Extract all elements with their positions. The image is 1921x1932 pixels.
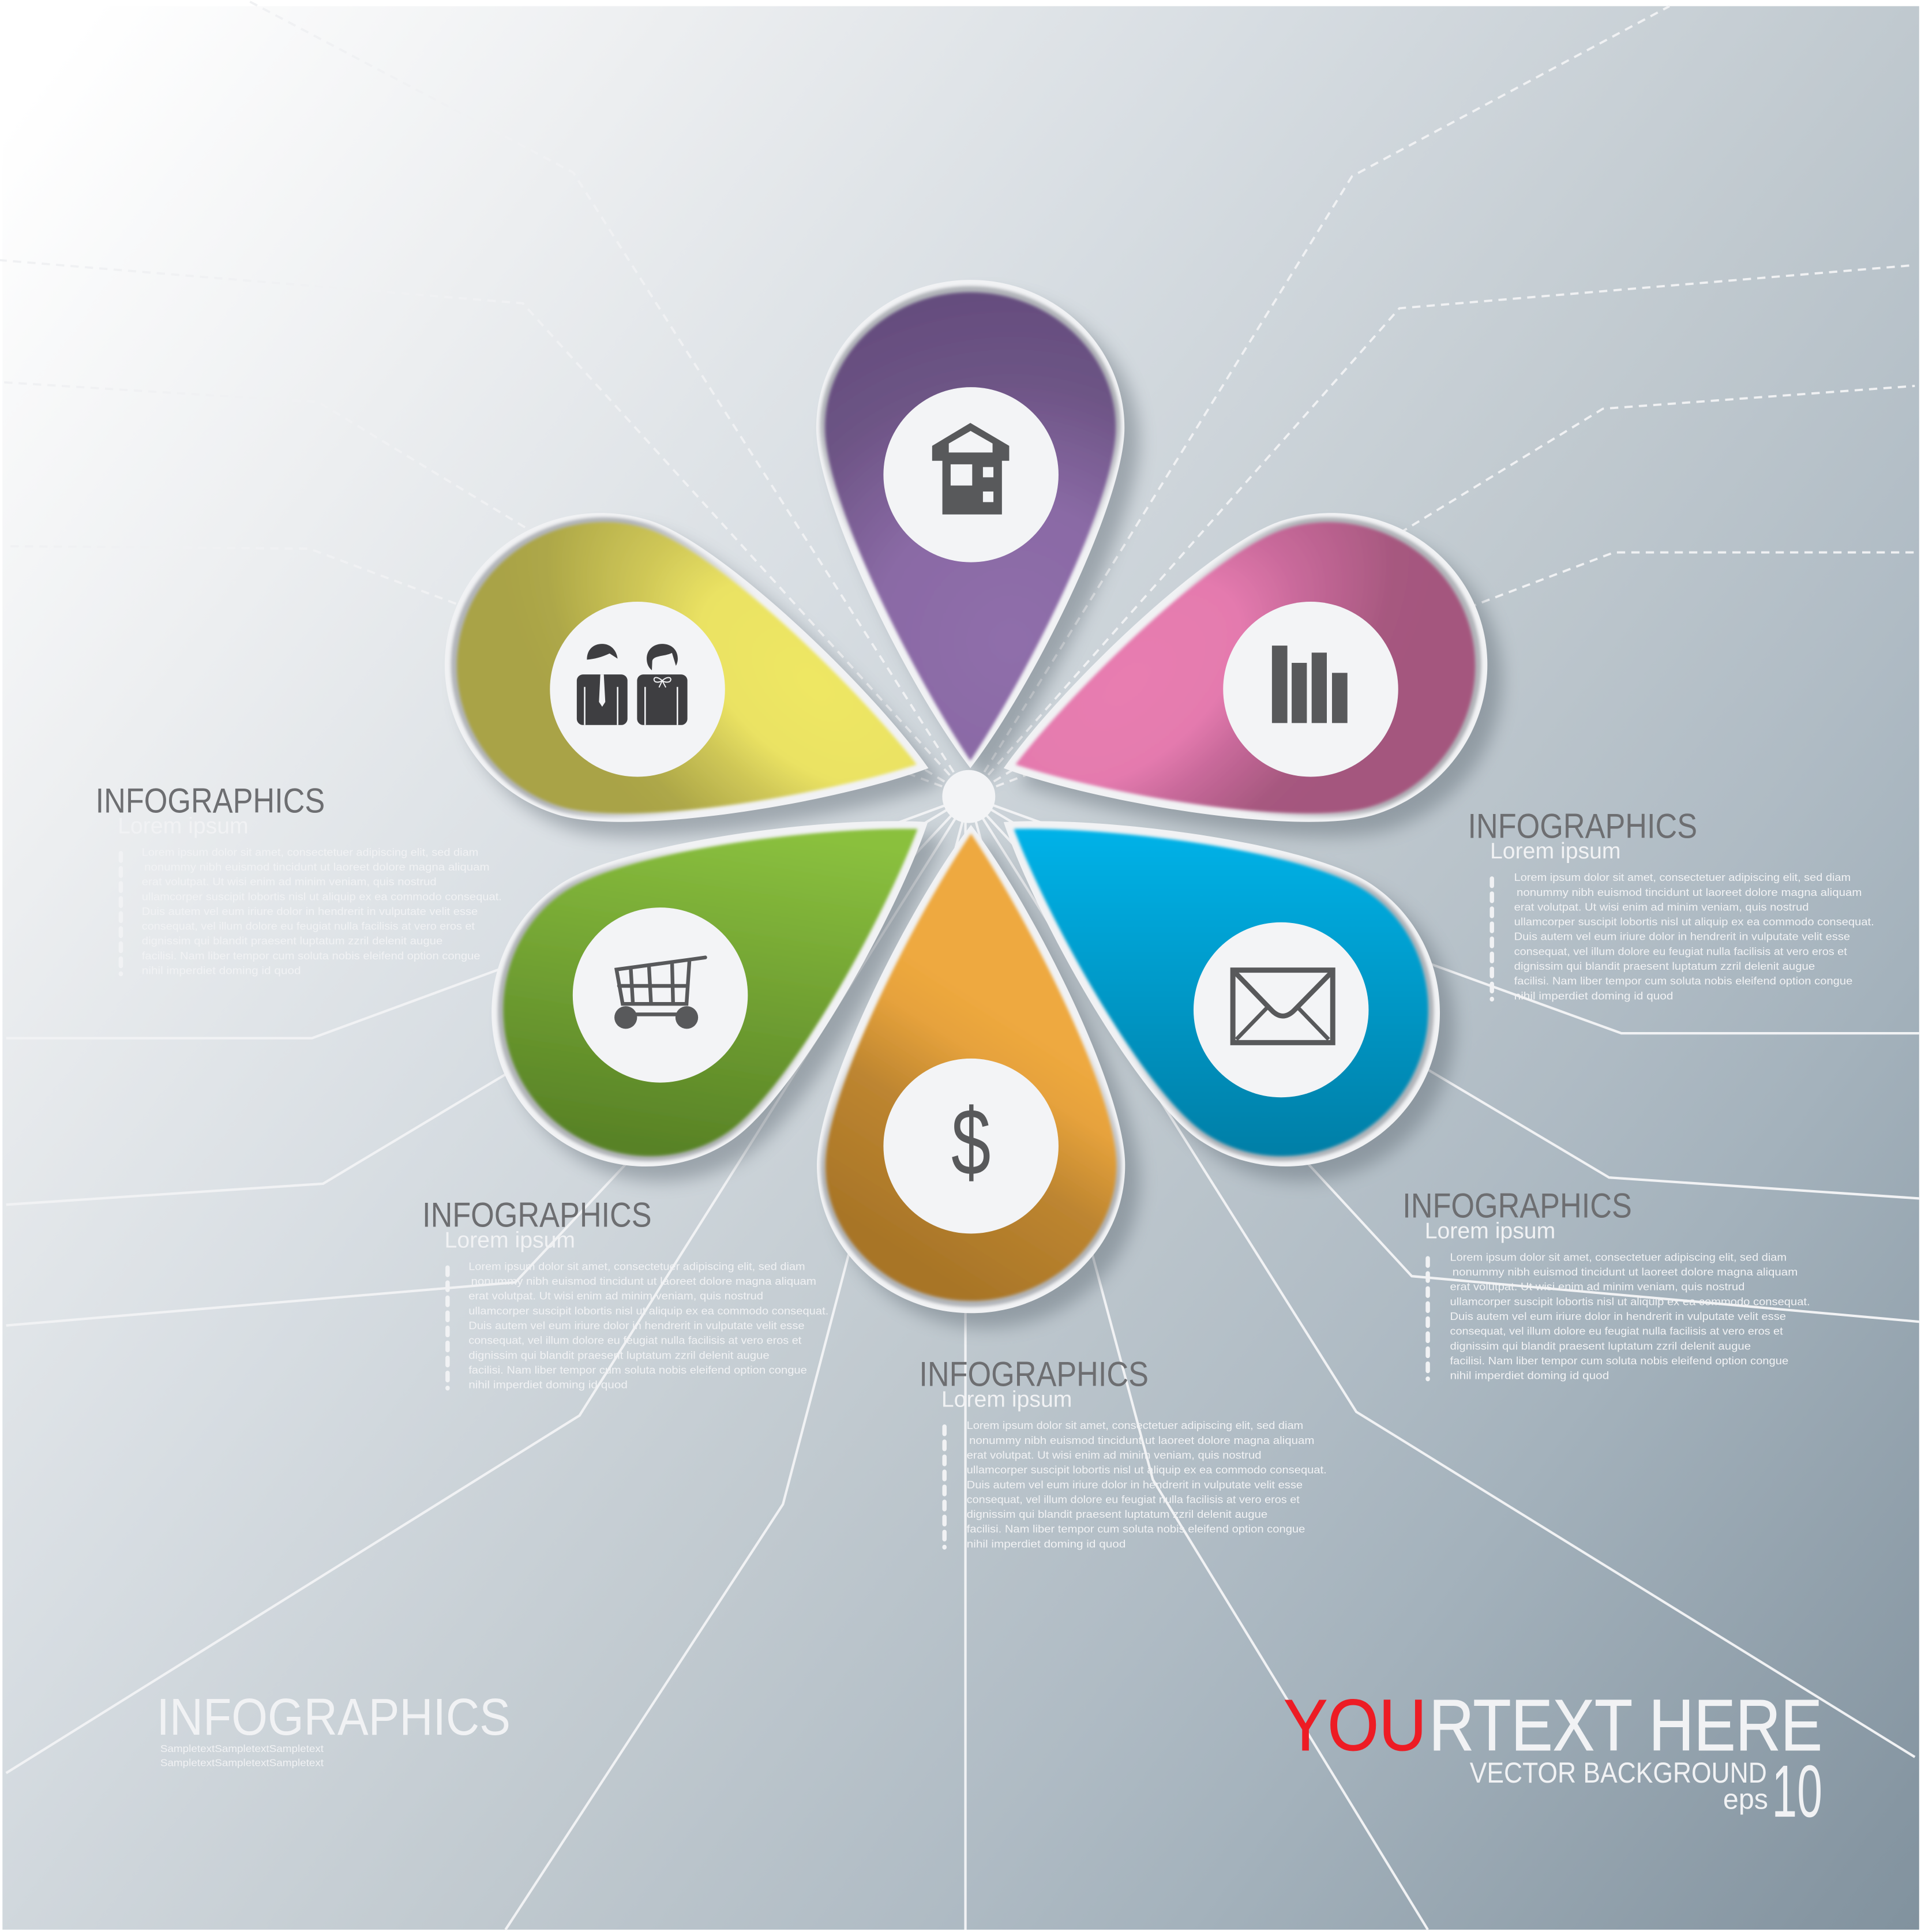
- text block: yellow petal: ullamcorper suscipit lobortis nisl ut aliquip ex ea commodo consequat.: [142, 890, 502, 902]
- icon: bar chart: [1223, 602, 1398, 777]
- petal: blue: [917, 694, 1500, 1226]
- text block: yellow petal: nonummy nibh euismod tincidunt ut laoreet dolore magna aliquam: [144, 861, 490, 873]
- title: bottom-left infographics: INFOGRAPHICS: [156, 1689, 511, 1746]
- text block: orange petal: nonummy nibh euismod tincidunt ut laoreet dolore magna aliquam: [969, 1434, 1314, 1446]
- text block: yellow petal: [96, 782, 502, 976]
- text block: orange petal: [919, 1355, 1327, 1550]
- text block: pink petal: Lorem ipsum dolor sit amet, consectetuer adipiscing elit, sed diam: [1514, 871, 1851, 883]
- text block: orange petal: consequat, vel illum dolore eu feugiat nulla facilisis at vero eros et: [967, 1493, 1300, 1505]
- text block: blue petal: consequat, vel illum dolore eu feugiat nulla facilisis at vero eros et: [1450, 1325, 1783, 1337]
- text block: yellow petal: INFOGRAPHICS: [96, 782, 325, 820]
- text block: blue petal: ullamcorper suscipit lobortis nisl ut aliquip ex ea commodo consequat.: [1450, 1295, 1810, 1307]
- petal: orange: [817, 825, 1125, 1313]
- text block: green petal: dignissim qui blandit praesent luptatum zzril delenit augue: [468, 1349, 770, 1361]
- text block: blue petal: Duis autem vel eum iriure dolor in hendrerit in vulputate velit esse: [1450, 1310, 1786, 1322]
- text block: blue petal: [1402, 1187, 1810, 1382]
- text block: orange petal: Lorem ipsum: [941, 1387, 1072, 1412]
- text block: pink petal: [1468, 806, 1874, 1001]
- text block: pink petal: nonummy nibh euismod tincidunt ut laoreet dolore magna aliquam: [1517, 886, 1862, 898]
- title: bottom-left infographics: SampletextSampletextSampletext: [160, 1743, 324, 1754]
- text block: yellow petal: dignissim qui blandit praesent luptatum zzril delenit augue: [142, 935, 442, 947]
- title: your text here: eps: [1723, 1784, 1768, 1815]
- text block: yellow petal: consequat, vel illum dolore eu feugiat nulla facilisis at vero eros et: [142, 920, 475, 932]
- text block: green petal: nihil imperdiet doming id quod: [468, 1379, 628, 1391]
- text block: yellow petal: Lorem ipsum: [118, 813, 249, 838]
- text block: green petal: INFOGRAPHICS: [422, 1196, 652, 1235]
- text block: blue petal: nonummy nibh euismod tincidunt ut laoreet dolore magna aliquam: [1453, 1266, 1798, 1278]
- text block: pink petal: ullamcorper suscipit lobortis nisl ut aliquip ex ea commodo consequat.: [1514, 916, 1874, 928]
- petal shadows: [421, 295, 1541, 1328]
- text block: green petal: Lorem ipsum dolor sit amet, consectetuer adipiscing elit, sed diam: [468, 1260, 805, 1272]
- text block: green petal: erat volutpat. Ut wisi enim ad minim veniam, quis nostrud: [468, 1290, 763, 1302]
- petal: purple: [816, 280, 1124, 768]
- title: bottom-left infographics: SampletextSampletextSampletext: [160, 1757, 324, 1769]
- title: your text here: YOU: [1284, 1685, 1427, 1766]
- icon: people: [550, 602, 725, 777]
- petal: pink: [958, 473, 1526, 916]
- petal: green: [432, 694, 1014, 1226]
- text block: orange petal: ullamcorper suscipit lobortis nisl ut aliquip ex ea commodo consequat.: [967, 1464, 1327, 1476]
- text block: green petal: [422, 1196, 828, 1391]
- text block: green petal: consequat, vel illum dolore eu feugiat nulla facilisis at vero eros et: [468, 1334, 802, 1346]
- text block: green petal: facilisi. Nam liber tempor cum soluta nobis eleifend option congue: [468, 1364, 807, 1376]
- text block: pink petal: dignissim qui blandit praesent luptatum zzril delenit augue: [1514, 960, 1815, 972]
- title: your text here: VECTOR BACKGROUND: [1470, 1757, 1767, 1789]
- title: bottom-left infographics: [156, 1689, 511, 1769]
- text block: orange petal: Lorem ipsum dolor sit amet, consectetuer adipiscing elit, sed diam: [967, 1419, 1303, 1431]
- text block: pink petal: INFOGRAPHICS: [1468, 806, 1697, 845]
- text block: green petal: nonummy nibh euismod tincidunt ut laoreet dolore magna aliquam: [471, 1275, 816, 1287]
- text block: blue petal: Lorem ipsum dolor sit amet, consectetuer adipiscing elit, sed diam: [1450, 1251, 1787, 1263]
- text block: yellow petal: Duis autem vel eum iriure dolor in hendrerit in vulputate velit esse: [142, 905, 478, 917]
- text block: blue petal: INFOGRAPHICS: [1402, 1187, 1632, 1225]
- text block: green petal: Duis autem vel eum iriure dolor in hendrerit in vulputate velit esse: [468, 1319, 805, 1331]
- petal: yellow: [406, 473, 974, 916]
- title: your text here: 10: [1772, 1750, 1822, 1833]
- text block: orange petal: facilisi. Nam liber tempor cum soluta nobis eleifend option congue: [967, 1523, 1305, 1535]
- text block: orange petal: nihil imperdiet doming id quod: [967, 1537, 1125, 1550]
- text block: blue petal: dignissim qui blandit praesent luptatum zzril delenit augue: [1450, 1340, 1751, 1352]
- icon: dollar: [883, 1059, 1059, 1233]
- text block: pink petal: facilisi. Nam liber tempor cum soluta nobis eleifend option congue: [1514, 975, 1852, 987]
- text block: orange petal: erat volutpat. Ut wisi enim ad minim veniam, quis nostrud: [967, 1449, 1262, 1461]
- text block: yellow petal: nihil imperdiet doming id quod: [142, 964, 301, 976]
- text block: yellow petal: Lorem ipsum dolor sit amet, consectetuer adipiscing elit, sed diam: [142, 846, 478, 858]
- solid connector lines: [6, 797, 1920, 1930]
- text block: green petal: Lorem ipsum: [445, 1228, 575, 1253]
- icon: house: [883, 387, 1059, 562]
- text block: blue petal: facilisi. Nam liber tempor cum soluta nobis eleifend option congue: [1450, 1355, 1788, 1367]
- text block: pink petal: Duis autem vel eum iriure dolor in hendrerit in vulputate velit esse: [1514, 931, 1850, 943]
- text block: pink petal: nihil imperdiet doming id quod: [1514, 989, 1673, 1001]
- dashed connector lines: [0, 1, 1915, 797]
- text block: blue petal: erat volutpat. Ut wisi enim ad minim veniam, quis nostrud: [1450, 1281, 1744, 1293]
- text block: green petal: ullamcorper suscipit lobortis nisl ut aliquip ex ea commodo consequat.: [468, 1304, 828, 1316]
- text block: orange petal: dignissim qui blandit praesent luptatum zzril delenit augue: [967, 1508, 1267, 1520]
- text block: orange petal: INFOGRAPHICS: [919, 1355, 1149, 1393]
- icon: dollar: $: [951, 1089, 990, 1195]
- text block: pink petal: erat volutpat. Ut wisi enim ad minim veniam, quis nostrud: [1514, 901, 1809, 913]
- icon: envelope: [1194, 922, 1368, 1097]
- text block: orange petal: Duis autem vel eum iriure dolor in hendrerit in vulputate velit esse: [967, 1479, 1303, 1491]
- title: your text here: RTEXT HERE: [1429, 1685, 1822, 1766]
- text block: yellow petal: erat volutpat. Ut wisi enim ad minim veniam, quis nostrud: [142, 876, 437, 888]
- center hub: [942, 770, 995, 823]
- title: your text here: [1284, 1685, 1822, 1833]
- text block: blue petal: Lorem ipsum: [1425, 1219, 1555, 1244]
- text block: pink petal: Lorem ipsum: [1490, 839, 1621, 864]
- icon: shopping cart: [573, 907, 748, 1083]
- text block: yellow petal: facilisi. Nam liber tempor cum soluta nobis eleifend option congue: [142, 950, 481, 962]
- text block: blue petal: nihil imperdiet doming id quod: [1450, 1370, 1609, 1382]
- text block: pink petal: consequat, vel illum dolore eu feugiat nulla facilisis at vero eros et: [1514, 945, 1848, 957]
